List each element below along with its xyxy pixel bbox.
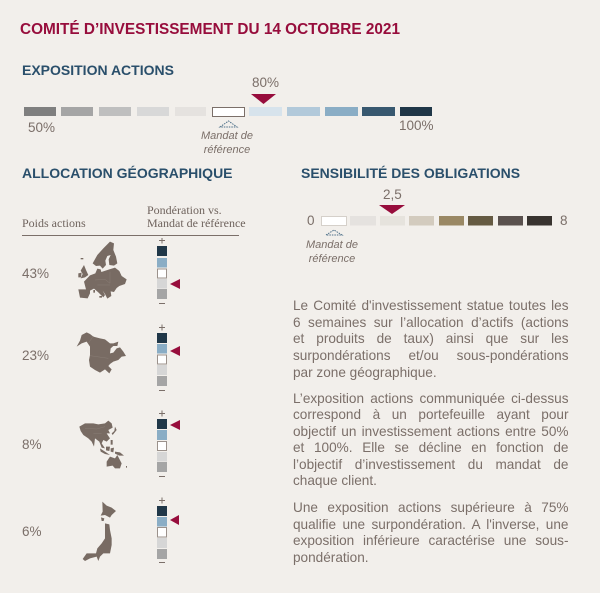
scale: exposition actions (24, 94, 432, 128)
value: 8%: 8% (22, 437, 42, 452)
text block: description: qualifie une surpondération. A l'inverse, une (293, 517, 568, 532)
label: mandat de référence (obligations) (306, 239, 358, 265)
label: mandat de référence: référence (204, 144, 250, 156)
label: mandat de référence (obligations): Mandat de (306, 239, 358, 251)
label: 50%: 50% (28, 120, 55, 135)
row: Asie Pacifique (22, 410, 180, 477)
text block: description: Une exposition actions supérieure à 75% (293, 500, 568, 515)
text block: description: surpondérations et/ou sous-pondérations (293, 348, 568, 363)
label: 80%: 80% (252, 75, 279, 90)
label: mandat de référence (201, 130, 253, 156)
indicator: pondération Amérique du Nord (157, 324, 180, 391)
indicator: pondération Europe (157, 238, 180, 304)
text block: description: par zone géographique. (293, 365, 437, 380)
map: Europe (78, 242, 127, 299)
label: 2,5: 2,5 (383, 187, 402, 202)
column header: pondération (147, 203, 246, 230)
text block: description: chaque client. (293, 473, 377, 488)
value: 43%: 43% (22, 266, 49, 281)
text block: description: exposition inférieure caractérise une sous- (293, 533, 568, 548)
map: Amérique du Nord (76, 332, 126, 374)
heading: sensibilité des obligations: SENSIBILITÉ DES OBLIGATIONS (301, 165, 520, 181)
indicator: pondération Japon (157, 498, 179, 563)
row: Japon (22, 498, 179, 563)
text block: description: objectif un investissement actions entre 50% (293, 424, 568, 439)
row: Europe (22, 238, 180, 304)
row: Amérique du Nord (22, 324, 180, 391)
label: 100%: 100% (399, 118, 434, 133)
scale: sensibilité (321, 205, 552, 236)
value: 6%: 6% (22, 524, 42, 539)
label: 8: 8 (560, 213, 568, 228)
column header: pondération: Mandat de référence (147, 216, 246, 230)
text block: description: et 100%. Elle se décline en fonction de (293, 440, 568, 455)
text block: description: L’exposition actions communiquée ci-dessus (293, 391, 568, 406)
header rule (22, 235, 239, 236)
text block: description (293, 298, 568, 565)
text block: description: l’objectif d’investissement du mandat de (293, 457, 568, 472)
text block: description: Le Comité d'investissement statue toutes les (293, 298, 568, 313)
text block: description: et produits de taux) ainsi que sur les (293, 331, 568, 346)
heading: allocation géographique: ALLOCATION GÉOGRAPHIQUE (22, 165, 233, 181)
title: COMITÉ D’INVESTISSEMENT DU 14 OCTOBRE 2021 (20, 21, 400, 38)
text block: description: 6 semaines sur l’allocation d’actifs (actions (293, 315, 568, 330)
label: mandat de référence: Mandat de (201, 130, 253, 142)
text block: description: pondération. (293, 550, 369, 565)
map: Japon (82, 502, 116, 561)
indicator: pondération Asie Pacifique (157, 410, 180, 477)
text block: description: correspond à un portefeuille ayant pour (293, 407, 568, 422)
map: Asie Pacifique (79, 420, 127, 468)
heading: exposition actions: EXPOSITION ACTIONS (22, 62, 174, 78)
column header: pondération: Pondération vs. (147, 203, 222, 217)
column header: poids actions: Poids actions (22, 216, 86, 230)
label: 0: 0 (307, 213, 315, 228)
label: mandat de référence (obligations): référence (309, 253, 355, 265)
value: 23%: 23% (22, 348, 49, 363)
